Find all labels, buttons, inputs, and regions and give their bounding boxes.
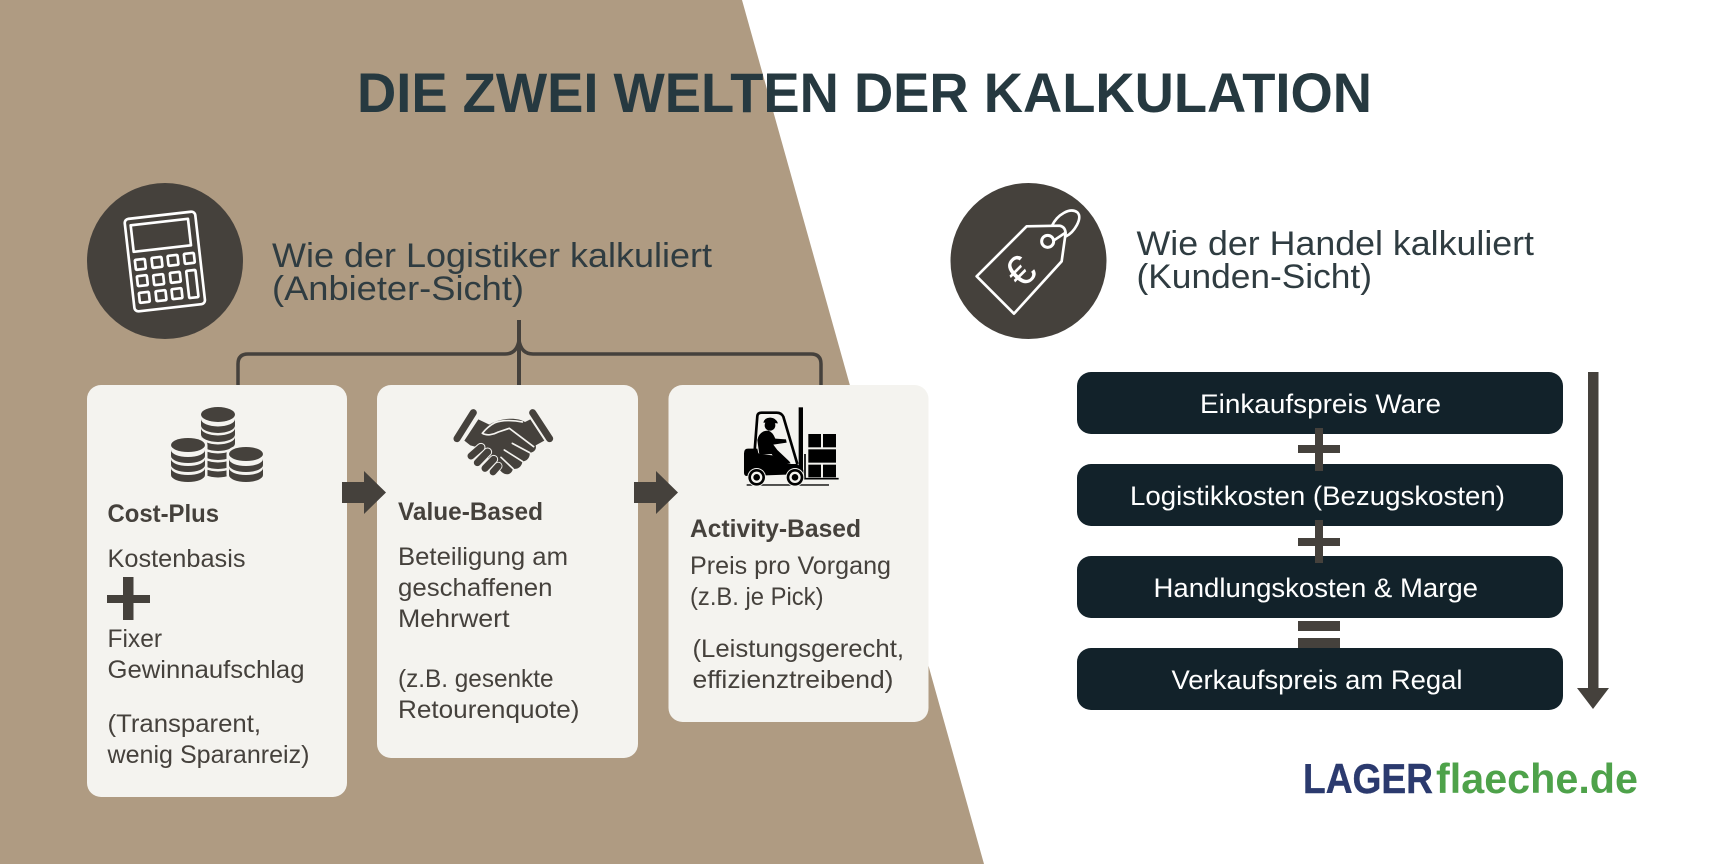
title: DIE ZWEI WELTEN DER KALKULATION: [357, 61, 1372, 124]
text: Beteiligung am geschaffenen Mehrwert: [398, 543, 568, 633]
icon: equals: [1298, 621, 1340, 648]
text: Fixer Gewinnaufschlag: [108, 625, 304, 684]
panel: Handel header: [950, 183, 1535, 339]
panel: Logistiker header: [87, 183, 713, 339]
icon: price tag: [950, 183, 1106, 339]
heading: Value-Based: Value-Based: [398, 498, 543, 526]
icon: coins: [171, 407, 263, 482]
arrow: Value-Based to Activity-Based: [634, 471, 678, 514]
heading: Handel: [1136, 225, 1535, 296]
logo: LAGERflaeche.de: LAGER: [1303, 755, 1433, 802]
background: tan diagonal panel: [0, 0, 984, 864]
box: Einkaufspreis Ware: Einkaufspreis Ware: [1200, 389, 1441, 419]
arrow: downward flow: [1577, 372, 1609, 709]
panel: price stack: [1077, 372, 1563, 710]
text: Transparent, wenig Sparanreiz: [106, 710, 309, 769]
heading: Logistiker: (Anbieter-Sicht): [272, 270, 524, 308]
text: Preis pro Vorgang: [690, 552, 891, 611]
text: Beteiligung am geschaffenen Mehrwert: Beteiligung am: [398, 543, 568, 571]
text: Preis pro Vorgang: (z.B. je Pick): [690, 583, 824, 611]
panel: Cost-Plus card: [87, 385, 347, 797]
panel: Value-Based card: [377, 385, 638, 758]
icon: plus 2: [1298, 520, 1340, 563]
box: Logistikkosten: Logistikkosten (Bezugskosten): [1130, 481, 1505, 511]
icon: plus: [107, 577, 150, 620]
icon: handshake: [457, 413, 550, 474]
logo: LAGERflaeche.de: [1303, 755, 1638, 802]
text: Transparent, wenig Sparanreiz: wenig Sparanreiz): [106, 741, 309, 769]
text: Transparent, wenig Sparanreiz: (Transparent,: [108, 710, 261, 738]
panel: Activity-Based card: [668, 385, 928, 722]
box: Logistikkosten: [1077, 464, 1563, 526]
icon: calculator: [87, 183, 243, 339]
text: Kostenbasis: Kostenbasis: [108, 545, 246, 573]
text: z.B. gesenkte Retourenquote: (z.B. gesenkte: [398, 665, 554, 693]
text: z.B. gesenkte Retourenquote: Retourenquote): [398, 696, 580, 724]
heading: Handel: (Kunden-Sicht): [1136, 258, 1372, 296]
heading: Logistiker: Wie der Logistiker kalkuliert: [272, 237, 713, 275]
heading: Logistiker: [272, 237, 713, 308]
heading: Cost-Plus: Cost-Plus: [108, 500, 219, 528]
text: Leistungsgerecht, effizienztreibend: effizienztreibend): [692, 666, 894, 694]
icon: forklift: [744, 407, 839, 487]
icon: price tag: €: [995, 246, 1046, 297]
text: Preis pro Vorgang: Preis pro Vorgang: [690, 552, 891, 580]
box: Handlungskosten & Marge: [1077, 556, 1563, 618]
heading: Activity-Based: Activity-Based: [690, 515, 861, 543]
text: z.B. gesenkte Retourenquote: [398, 665, 580, 724]
bracket connecting heading to three cards: [238, 320, 821, 386]
text: Leistungsgerecht, effizienztreibend: (Leistungsgerecht,: [692, 635, 904, 663]
text: Fixer Gewinnaufschlag: Gewinnaufschlag: [108, 656, 304, 684]
box: Einkaufspreis Ware: [1077, 372, 1563, 434]
text: Leistungsgerecht, effizienztreibend: [692, 635, 904, 694]
text: Fixer Gewinnaufschlag: Fixer: [108, 625, 162, 653]
text: Beteiligung am geschaffenen Mehrwert: geschaffenen: [398, 574, 552, 602]
arrow: Cost-Plus to Value-Based: [342, 471, 386, 514]
heading: Handel: Wie der Handel kalkuliert: [1136, 225, 1535, 263]
logo: LAGERflaeche.de: flaeche.de: [1436, 755, 1638, 802]
box: Handlungskosten & Marge: Handlungskosten & Marge: [1154, 573, 1478, 603]
icon: plus 1: [1298, 428, 1340, 471]
text: Beteiligung am geschaffenen Mehrwert: Mehrwert: [398, 605, 510, 633]
box: Verkaufspreis am Regal: [1077, 648, 1563, 710]
box: Verkaufspreis am Regal: Verkaufspreis am Regal: [1172, 665, 1462, 695]
